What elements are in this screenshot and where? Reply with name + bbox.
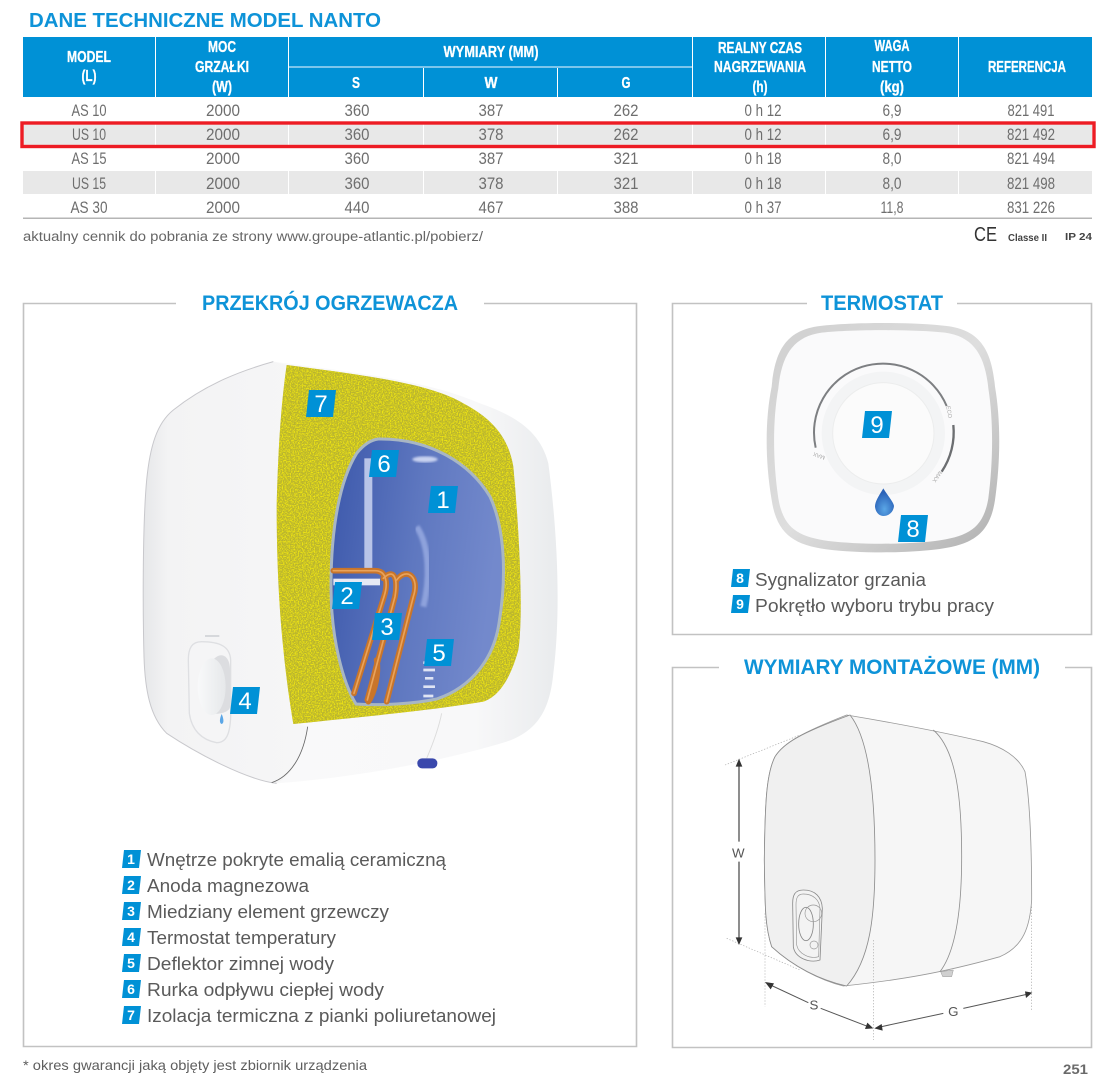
row: AS 30: 11,8 (880, 198, 904, 217)
table header: WAGA (874, 38, 910, 55)
row: US 10 highlighted: 262 (614, 125, 638, 144)
table header: (h) (752, 79, 768, 96)
legend item 4: 4 (127, 929, 135, 945)
row: AS 15: 0 h 18 (744, 149, 782, 168)
row: US 10 highlighted: US 10 (72, 125, 106, 144)
dimension S: S (810, 997, 819, 1012)
label 7 (306, 390, 336, 418)
row: US 15: 8,0 (882, 174, 902, 193)
row: AS 15: 2000 (206, 149, 240, 168)
table header: NAGRZEWANIA (714, 59, 806, 76)
illustration: dimension drawing (725, 715, 1032, 1040)
row: US 10 highlighted: 0 h 12 (744, 125, 782, 144)
panel: cross-section (24, 291, 636, 1046)
label 8: 8 (906, 516, 920, 543)
row: US 10 highlighted (22, 123, 1094, 146)
label 3 (372, 613, 402, 641)
panel: thermostat (672, 292, 1092, 634)
row: AS 30: 467 (478, 198, 504, 217)
row: US 10 highlighted: 360 (344, 125, 370, 144)
illustration: thermostat control: ECO (944, 406, 952, 419)
table header: REALNY CZAS (718, 40, 802, 57)
certification marks (974, 224, 1092, 246)
label 3: 3 (380, 614, 394, 641)
certification marks: IP 24 (1065, 231, 1092, 243)
row: AS 10: 6,9 (882, 101, 902, 120)
dimension G (874, 991, 1032, 1031)
legend item 6: Rurka odpływu ciepłej wody (147, 980, 384, 1000)
dimension G: G (948, 1004, 959, 1019)
row: AS 30: 440 (344, 198, 370, 217)
row: AS 10 (72, 101, 1054, 120)
legend item 3: Miedziany element grzewczy (147, 902, 389, 922)
table header: GRZAŁKI (195, 59, 249, 76)
label 4 (230, 687, 260, 715)
label 9: 9 (870, 412, 884, 439)
legend item 8: 8 (736, 570, 744, 586)
table header: (W) (212, 79, 232, 96)
label 5 (424, 639, 454, 667)
panel: mounting dimensions (672, 656, 1092, 1048)
row: AS 15: 360 (344, 149, 370, 168)
row: AS 10: 821 491 (1008, 101, 1054, 120)
row: US 15: 360 (344, 174, 370, 193)
dimension W: W (732, 845, 745, 860)
row: AS 30: AS 30 (70, 198, 108, 217)
table header: REFERENCJA (988, 59, 1066, 76)
row: US 15 (23, 171, 1092, 194)
illustration: water heater cutaway (143, 362, 558, 783)
dimension W (732, 759, 745, 945)
label 5: 5 (432, 640, 446, 667)
row: AS 15: 8,0 (882, 149, 902, 168)
row: AS 30: 831 226 (1007, 198, 1055, 217)
row: US 10 highlighted: 6,9 (882, 125, 902, 144)
legend item 9: Pokrętło wyboru trybu pracy (755, 596, 994, 616)
label 9 (862, 411, 892, 439)
label 2: 2 (340, 583, 354, 610)
row: AS 10: 360 (344, 101, 370, 120)
row: US 15: 821 498 (1007, 174, 1055, 193)
certification marks: CE (974, 224, 997, 246)
row: AS 15: 821 494 (1007, 149, 1055, 168)
row: US 15: US 15 (72, 174, 106, 193)
row: AS 10: 0 h 12 (744, 101, 782, 120)
heading: cross-section: PRZEKRÓJ OGRZEWACZA (202, 291, 458, 315)
label 7: 7 (314, 391, 328, 418)
certification marks: Classe II (1008, 232, 1047, 244)
label 6: 6 (377, 451, 391, 478)
table header: WYMIARY (MM) (444, 44, 538, 61)
legend: parts list (122, 850, 496, 1026)
table header: MODEL (67, 49, 111, 66)
heading: thermostat: TERMOSTAT (821, 292, 943, 315)
row: AS 30: 2000 (206, 198, 240, 217)
row: AS 10: 387 (478, 101, 504, 120)
label 4: 4 (238, 688, 252, 715)
legend item 6: 6 (127, 981, 135, 997)
price list note: aktualny cennik do pobrania ze strony www.groupe-atlantic.pl/pobierz/ (23, 229, 483, 244)
row: AS 30: 0 h 37 (744, 198, 782, 217)
row: AS 10: AS 10 (72, 101, 106, 120)
row: US 15: 378 (478, 174, 504, 193)
row: AS 15 (72, 149, 1055, 168)
row: AS 15: AS 15 (72, 149, 106, 168)
row: AS 30 (70, 198, 1055, 217)
illustration: thermostat control: MAX (930, 469, 942, 483)
row: US 10 highlighted: 2000 (206, 125, 240, 144)
row: AS 15: 321 (614, 149, 638, 168)
legend item 3: 3 (127, 903, 135, 919)
row: AS 30: 388 (614, 198, 638, 217)
legend item 2: Anoda magnezowa (147, 876, 310, 896)
label 1: 1 (436, 487, 450, 514)
label 6 (369, 450, 399, 478)
table: technical data (22, 37, 1094, 219)
illustration: thermostat control: MAX (812, 450, 826, 460)
table header: W (484, 75, 498, 92)
table header: G (622, 75, 630, 92)
heading: mounting dimensions: WYMIARY MONTAŻOWE (MM) (744, 656, 1040, 679)
legend item 4: Termostat temperatury (147, 928, 336, 948)
table header: MOC (208, 39, 236, 56)
legend item 1: 1 (127, 851, 135, 867)
table header: NETTO (872, 59, 912, 76)
label 1 (428, 486, 458, 514)
page number: 251 (1063, 1061, 1088, 1077)
legend item 7: 7 (127, 1007, 135, 1023)
row: US 15: 2000 (206, 174, 240, 193)
row: AS 10: 2000 (206, 101, 240, 120)
label 8 (898, 515, 928, 543)
row: US 15: 0 h 18 (744, 174, 782, 193)
legend item 2: 2 (127, 877, 135, 893)
dimension S (765, 982, 873, 1029)
table header (23, 37, 1092, 97)
legend item 5: Deflektor zimnej wody (147, 954, 334, 974)
row: AS 10: 262 (614, 101, 638, 120)
legend item 9: 9 (736, 596, 744, 612)
illustration: thermostat control (767, 323, 999, 552)
legend item 5: 5 (127, 955, 135, 971)
warranty footnote: * okres gwarancji jaką objęty jest zbiornik urządzenia (23, 1057, 367, 1073)
legend item 8: Sygnalizator grzania (755, 570, 927, 590)
row: US 15: 321 (614, 174, 638, 193)
row: AS 15: 387 (478, 149, 504, 168)
label 2 (332, 582, 362, 610)
legend item 7: Izolacja termiczna z pianki poliuretanowej (147, 1006, 496, 1026)
legend item 1: Wnętrze pokryte emalią ceramiczną (147, 850, 447, 870)
table header: (L) (82, 68, 96, 85)
title: DANE TECHNICZNE MODEL NANTO (29, 10, 381, 32)
table header: S (352, 75, 360, 92)
row: US 10 highlighted: 821 492 (1007, 125, 1055, 144)
row: US 10 highlighted: 378 (478, 125, 504, 144)
table header: (kg) (880, 79, 904, 96)
